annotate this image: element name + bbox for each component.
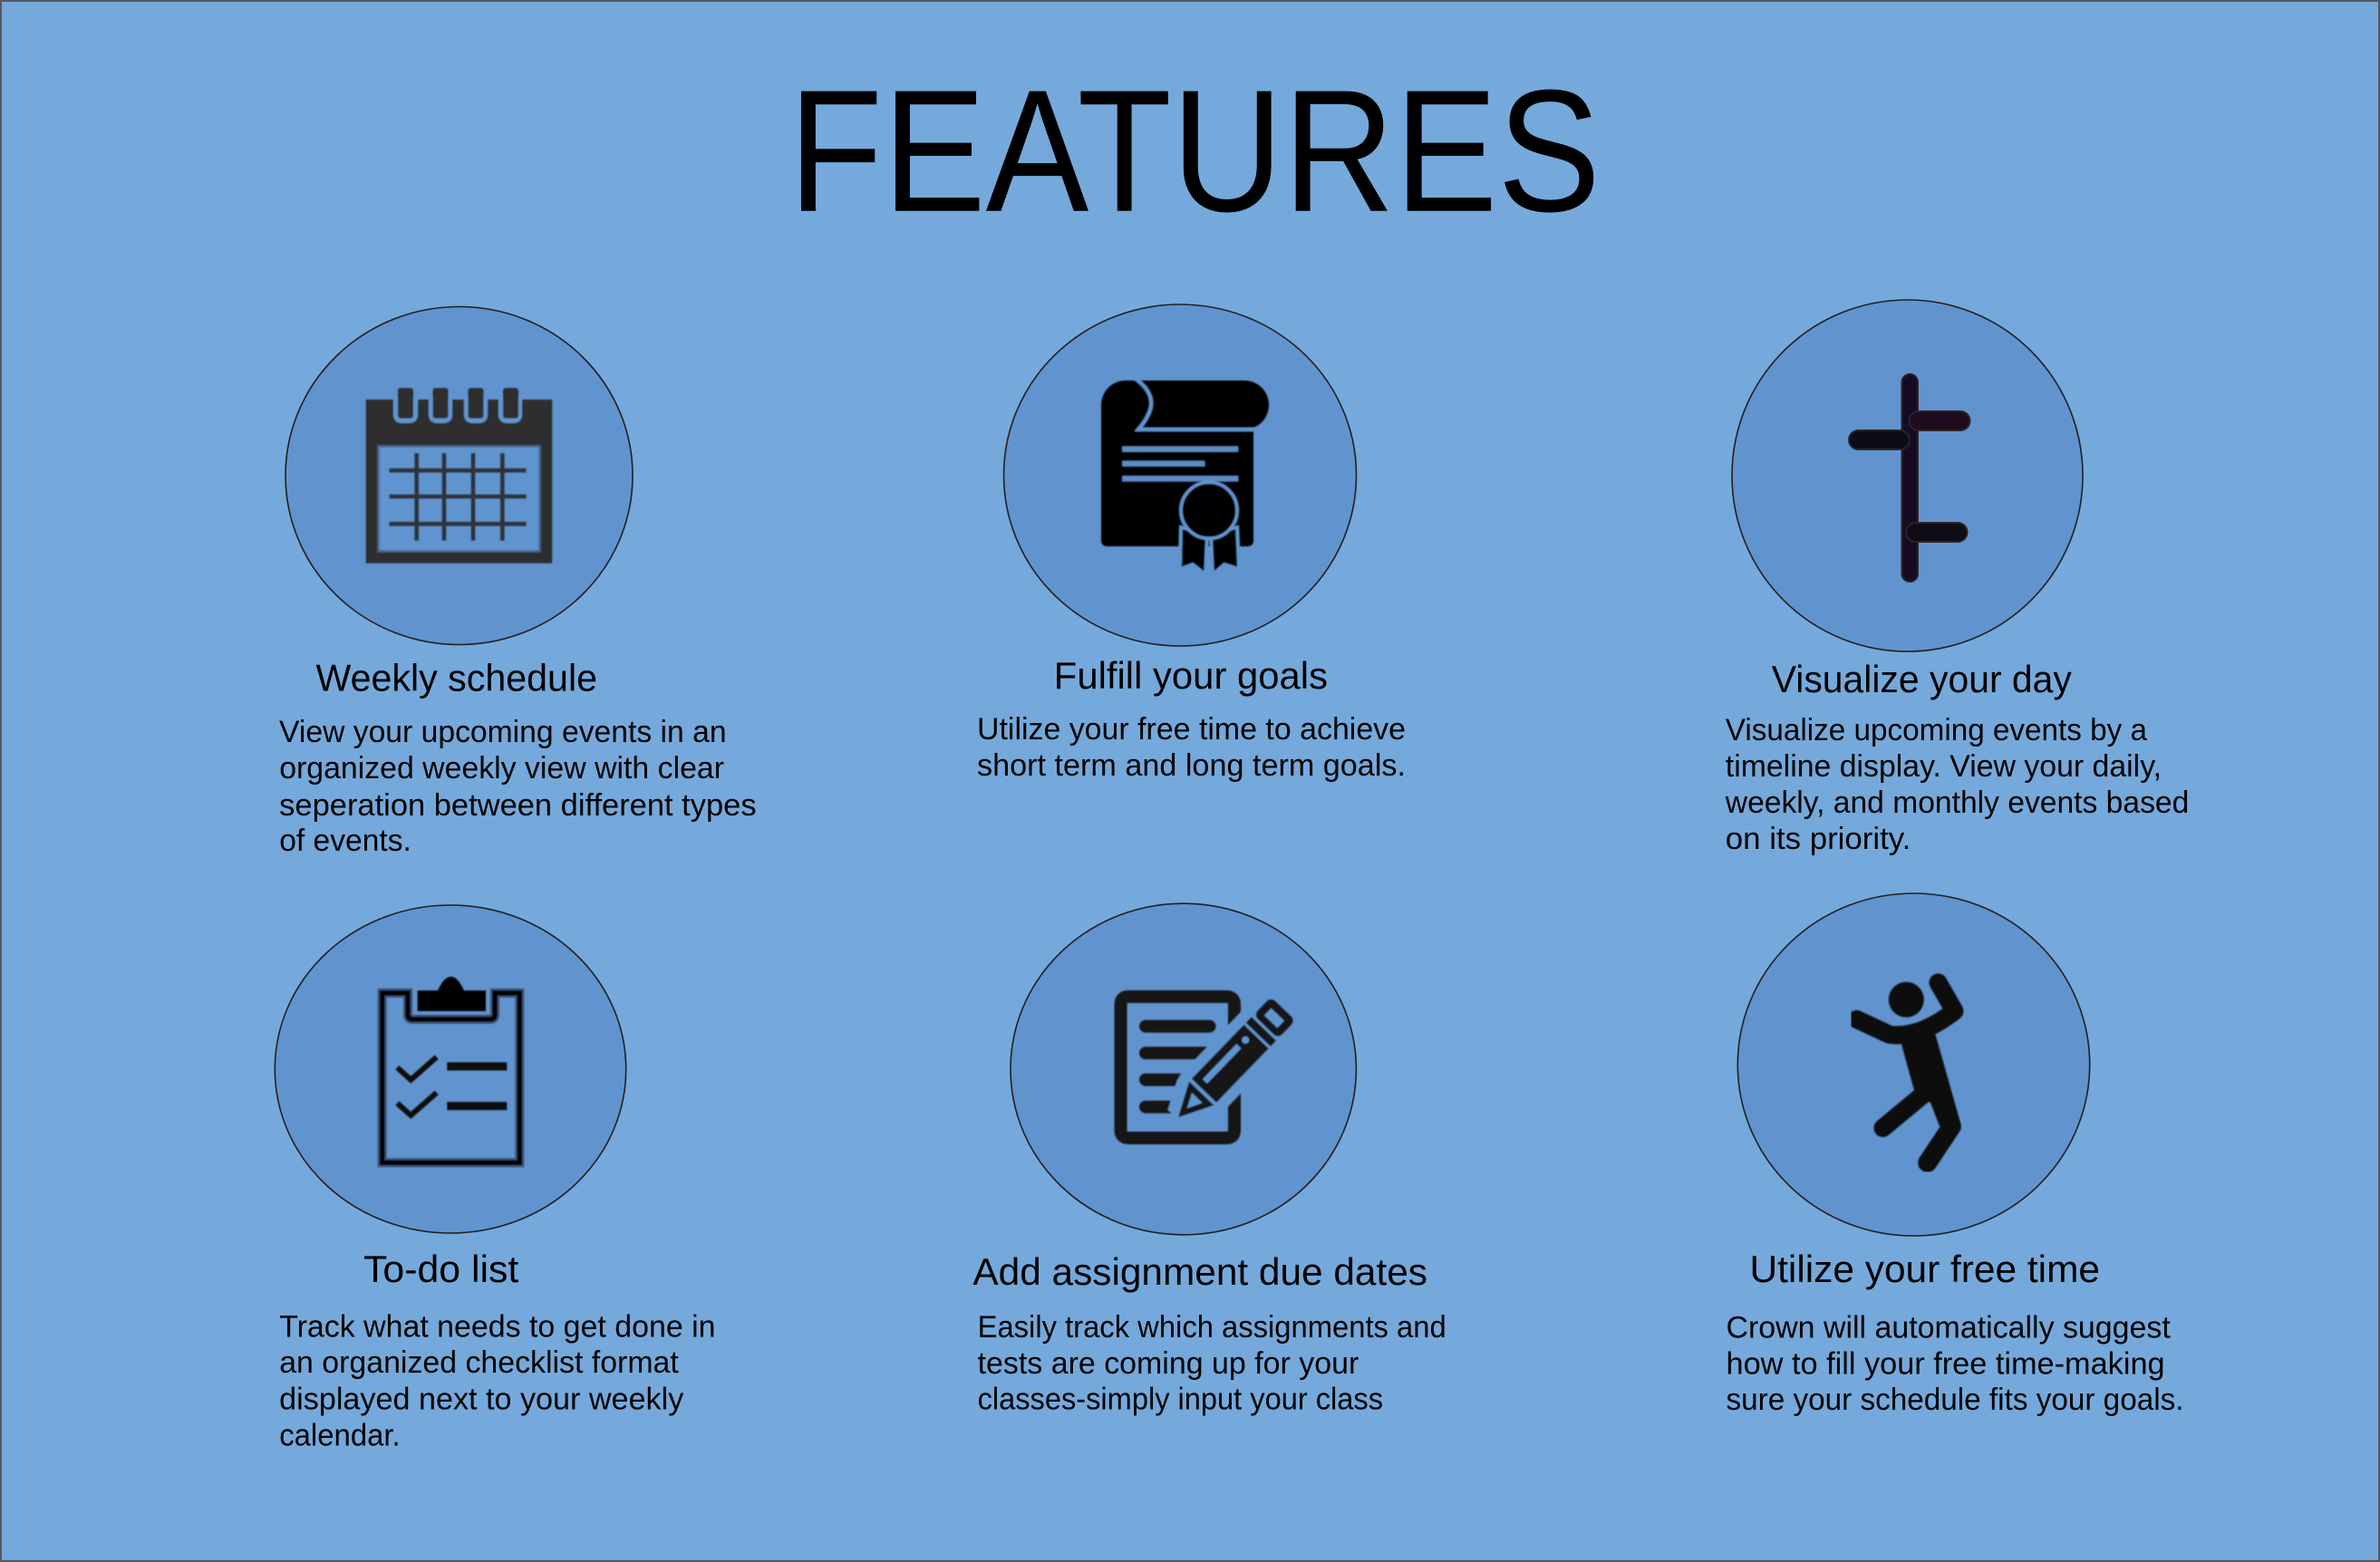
text: utilize your free time description: sure your schedule fits your goals. xyxy=(1726,1383,2184,1417)
heading: weekly schedule: Weekly schedule xyxy=(315,657,597,699)
text: weekly schedule description: View your upcoming events in an xyxy=(279,715,727,749)
text: to-do list description xyxy=(279,1309,716,1452)
text: visualize your day description: Visualize upcoming events by a xyxy=(1726,713,2147,747)
text: add assignment due dates description: Easily track which assignments and xyxy=(978,1310,1446,1345)
text: weekly schedule description: of events. xyxy=(279,824,411,858)
panel: weekly schedule xyxy=(279,306,757,858)
heading: utilize your free time: Utilize your free time xyxy=(1749,1248,2100,1290)
title: FEATURES xyxy=(788,53,1601,248)
circle: to-do list xyxy=(275,905,626,1233)
circle: weekly schedule xyxy=(285,306,633,645)
text: weekly schedule description: organized weekly view with clear xyxy=(279,751,724,786)
icon: clipboard checklist xyxy=(382,977,519,1162)
text: to-do list description: Track what needs to get done in xyxy=(279,1309,716,1344)
circle: utilize your free time xyxy=(1737,893,2090,1236)
circle: fulfill your goals xyxy=(1004,304,1356,646)
text: to-do list description: an organized checklist format xyxy=(279,1345,679,1380)
text: utilize your free time description: Crown will automatically suggest xyxy=(1726,1311,2171,1345)
icon: certificate scroll xyxy=(1101,379,1269,574)
text: fulfill your goals description: Utilize your free time to achieve xyxy=(977,712,1406,747)
icon: jumping person xyxy=(1856,982,1960,1162)
panel: to-do list xyxy=(275,905,716,1452)
text: add assignment due dates description: classes-simply input your class xyxy=(978,1382,1383,1416)
heading: fulfill your goals: Fulfill your goals xyxy=(1054,654,1328,697)
text: fulfill your goals description xyxy=(977,712,1406,783)
panel: utilize your free time xyxy=(1726,893,2184,1417)
text: visualize your day description xyxy=(1725,713,2189,856)
heading: to-do list: To-do list xyxy=(363,1248,519,1290)
panel: fulfill your goals xyxy=(977,304,1406,783)
text: utilize your free time description: how to fill your free time-making xyxy=(1726,1347,2165,1382)
text: utilize your free time description xyxy=(1726,1311,2184,1417)
circle: visualize your day xyxy=(1732,300,2083,651)
panel: add assignment due dates xyxy=(972,903,1446,1416)
panel: visualize your day xyxy=(1725,300,2189,856)
text: fulfill your goals description: short term and long term goals. xyxy=(977,748,1406,783)
text: to-do list description: displayed next to your weekly xyxy=(279,1382,683,1416)
icon: notepad and pencil xyxy=(1120,974,1318,1138)
text: to-do list description: calendar. xyxy=(279,1418,401,1452)
text: visualize your day description: timeline display. View your daily, xyxy=(1726,749,2162,784)
text: visualize your day description: on its priority. xyxy=(1726,822,1911,856)
icon: timeline xyxy=(1849,374,1970,582)
circle: add assignment due dates xyxy=(1011,903,1356,1235)
icon: calendar xyxy=(366,388,552,564)
text: weekly schedule description xyxy=(279,715,757,858)
text: add assignment due dates description: tests are coming up for your xyxy=(978,1346,1359,1381)
text: visualize your day description: weekly, and monthly events based xyxy=(1725,786,2189,820)
text: add assignment due dates description xyxy=(978,1310,1446,1416)
heading: visualize your day: Visualize your day xyxy=(1772,658,2072,700)
heading: add assignment due dates: Add assignment due dates xyxy=(972,1250,1427,1293)
text: weekly schedule description: seperation between different types xyxy=(279,788,757,823)
